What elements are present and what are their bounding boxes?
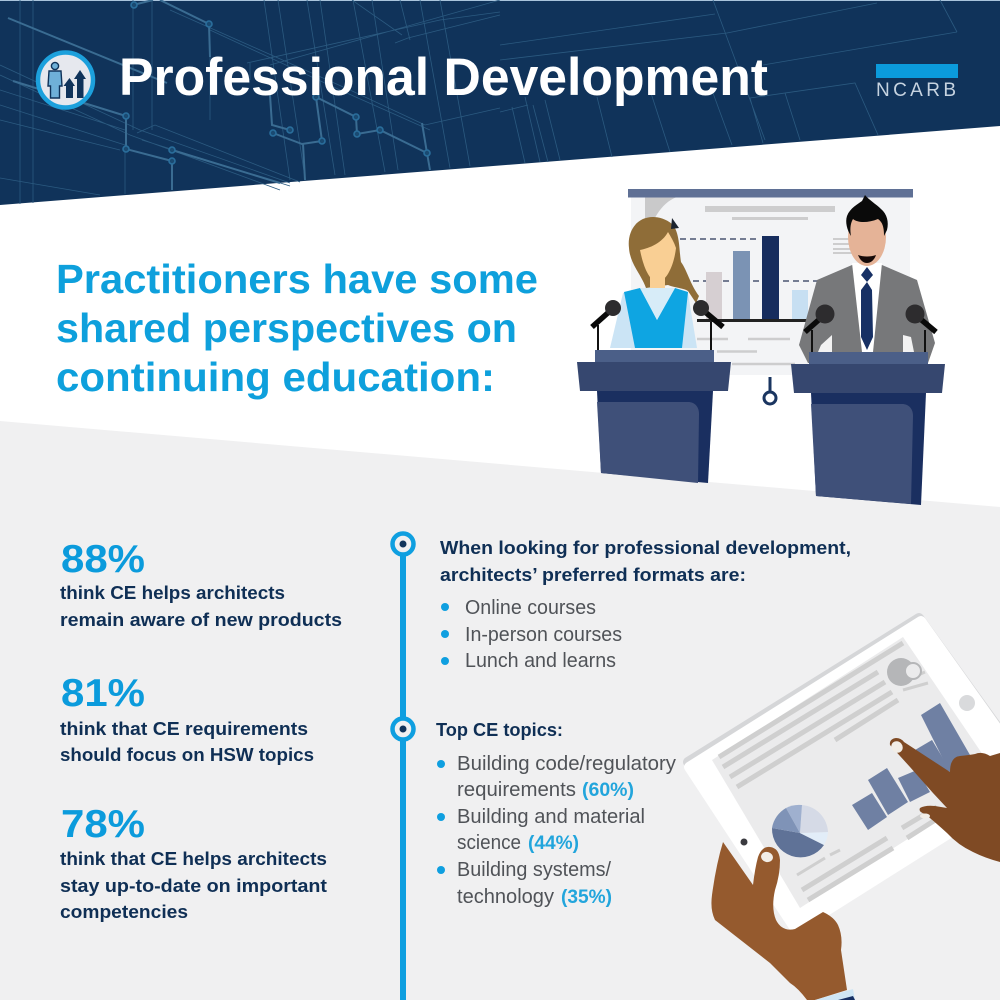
- timeline: [392, 534, 414, 1000]
- panel: header banner: [0, 0, 1000, 205]
- stat: 88%: think CE helps architects: [60, 582, 285, 603]
- text block: preferred formats: Online courses: [465, 597, 596, 619]
- illustration: woman's microphones: [592, 300, 723, 350]
- stat: 78%: competencies: [60, 901, 188, 922]
- text block: top CE topics: Building systems/: [457, 859, 611, 881]
- illustration: presentation screen: [628, 189, 913, 404]
- illustration: man presenter: [799, 195, 935, 363]
- heading: shared perspectives on: [56, 305, 517, 351]
- illustration: right hand pointing: [889, 738, 1000, 862]
- chart: tablet bar chart: [852, 703, 970, 830]
- stat: 81%: should focus on HSW topics: [60, 744, 314, 765]
- text block: top CE topics: (44%): [528, 833, 579, 854]
- heading: continuing education:: [56, 354, 495, 400]
- stat: 88%: remain aware of new products: [60, 609, 342, 630]
- stat: 88%: [60, 538, 342, 630]
- stat: 78%: [60, 803, 327, 922]
- heading: [56, 256, 538, 400]
- stat: 81%: 81%: [61, 672, 145, 715]
- stat: 78%: stay up-to-date on important: [60, 875, 327, 896]
- text block: top CE topics: science: [457, 832, 521, 854]
- icon: person with rising arrows: [38, 52, 93, 108]
- heading: Practitioners have some: [56, 256, 538, 302]
- illustration: left hand holding tablet: [711, 842, 855, 1000]
- logo: NCARB: [876, 64, 958, 101]
- text block: preferred formats: [440, 537, 851, 672]
- illustration: woman's lectern: [577, 350, 731, 483]
- text block: top CE topics: [436, 719, 676, 908]
- text block: top CE topics: requirements: [457, 779, 576, 801]
- text block: top CE topics: Top CE topics:: [436, 719, 563, 740]
- text block: top CE topics: (35%): [561, 887, 612, 908]
- panel: grey lower background: [0, 421, 1000, 1000]
- text block: preferred formats: In-person courses: [465, 624, 622, 646]
- stat: 88%: 88%: [61, 538, 145, 581]
- illustration: man's lectern: [791, 352, 945, 505]
- chart: tablet pie chart: [772, 805, 828, 857]
- logo: NCARB: NCARB: [876, 80, 956, 101]
- illustration: woman presenter: [610, 217, 699, 348]
- text block: top CE topics: technology: [457, 886, 554, 908]
- text block: top CE topics: Building code/regulatory: [457, 753, 676, 775]
- stat: 81%: think that CE requirements: [60, 718, 308, 739]
- text block: preferred formats: When looking for professional development,: [440, 537, 851, 558]
- illustration: tablet: [688, 618, 1000, 930]
- stat: 78%: think that CE helps architects: [60, 848, 327, 869]
- title: Professional Development: [119, 48, 768, 107]
- illustration: man's microphones: [805, 304, 936, 352]
- text block: preferred formats: Lunch and learns: [465, 650, 616, 672]
- stat: 78%: 78%: [61, 803, 145, 846]
- text block: top CE topics: (60%): [582, 780, 634, 801]
- text block: top CE topics: Building and material: [457, 806, 645, 828]
- stat: 81%: [60, 672, 314, 765]
- text block: preferred formats: architects’ preferred formats are:: [440, 564, 746, 585]
